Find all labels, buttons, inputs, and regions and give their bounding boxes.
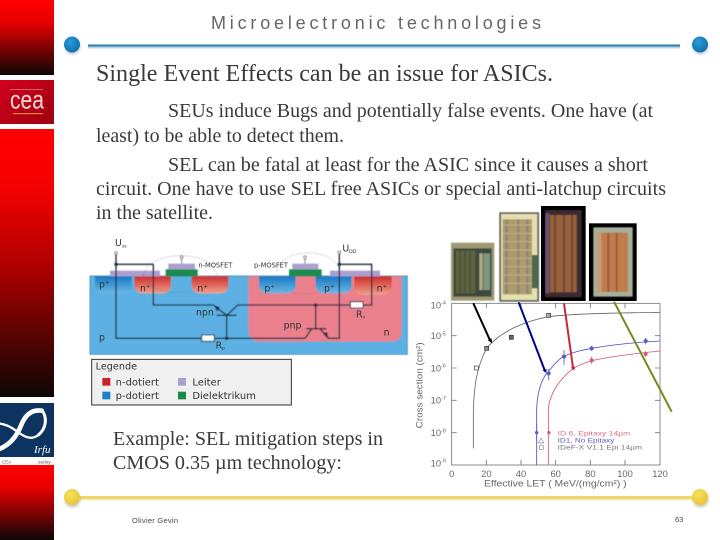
cross section chart: 80: [585, 469, 596, 479]
cross section chart: -9: [441, 459, 446, 465]
cross section chart: 10: [431, 300, 441, 310]
cross section chart: 0: [449, 469, 454, 479]
example caption: [113, 428, 383, 474]
example caption: Example: SEL mitigation steps in: [113, 428, 383, 450]
cross section chart: 40: [516, 469, 526, 479]
cross section chart: -8: [441, 428, 446, 434]
legend box: p-dotiert: [116, 391, 159, 402]
latchup cross-section diagram: [90, 238, 407, 405]
Irfu logo: saclay: [38, 460, 52, 464]
chip 1: [451, 243, 494, 301]
cross section chart: 10: [431, 331, 441, 341]
cross section chart: -7: [441, 396, 446, 402]
cross section chart: [415, 300, 672, 488]
body text: SEU: [96, 100, 653, 147]
latchup cross-section diagram: DD: [349, 249, 357, 255]
CEA logo: cea: [10, 84, 44, 114]
latchup cross-section diagram: p: [324, 283, 330, 294]
cross section chart: Effective LET ( MeV/(mg/cm²) ): [484, 478, 627, 488]
Irfu logo: [0, 403, 54, 465]
CEA logo: [0, 80, 54, 124]
left red sidebar: [0, 0, 54, 540]
latchup cross-section diagram: +: [146, 284, 150, 290]
body text: SEL: in the satellite.: [96, 202, 213, 224]
body text: SEU: SEUs induce Bugs and potentially false events. One have (at: [168, 100, 653, 122]
cross section chart: 100: [617, 469, 633, 479]
footer author: Olivier Gevin: [132, 516, 178, 525]
latchup cross-section diagram: +: [270, 284, 275, 290]
title: Microelectronic technologies: [211, 13, 541, 33]
latchup cross-section diagram: R: [356, 309, 362, 320]
latchup cross-section diagram: pnp: [284, 321, 301, 332]
latchup cross-section diagram: +: [203, 284, 208, 290]
latchup cross-section diagram: U: [342, 244, 349, 255]
latchup cross-section diagram: +: [330, 284, 334, 290]
latchup cross-section diagram: p: [264, 283, 270, 294]
cross section chart: IDeF-X V1.1 Epi 14µm: [558, 445, 643, 452]
latchup cross-section diagram: p: [99, 279, 105, 290]
latchup cross-section diagram: n: [384, 327, 390, 338]
Irfu logo: Irfu: [33, 444, 51, 456]
legend box: n-dotiert: [116, 377, 159, 388]
legend box: Dielektrikum: [192, 391, 256, 402]
latchup cross-section diagram: npn: [196, 308, 214, 319]
example caption: CMOS 0.35 µm technology:: [113, 452, 342, 474]
latchup cross-section diagram: ss: [122, 244, 127, 249]
body text: SEL: circuit. One have to use SEL free ASICs or special anti-latchup circuits: [96, 178, 666, 200]
cross section chart: Cross section (cm²): [415, 342, 425, 428]
legend box: [92, 359, 291, 405]
cross section chart: ID 6, Epitaxy 14µm: [558, 430, 631, 437]
cross section chart: 10: [431, 396, 441, 406]
latchup cross-section diagram: n: [197, 283, 203, 294]
cross section chart: 10: [431, 363, 441, 373]
chip 2: [499, 212, 539, 302]
cross section chart: -4: [441, 301, 446, 307]
latchup cross-section diagram: p-MOSFET: [254, 262, 289, 270]
bottom yellow divider: [64, 489, 708, 508]
body text: SEU: least) to be able to detect them.: [96, 125, 344, 147]
cross section chart: 60: [550, 469, 561, 479]
heading: Single Event Effects can be an issue for ASICs.: [96, 61, 553, 87]
latchup cross-section diagram: n-MOSFET: [198, 261, 233, 269]
cross section chart: 120: [652, 469, 668, 479]
latchup cross-section diagram: p: [222, 347, 225, 352]
cross section chart: ID1, No Epitaxy: [558, 438, 615, 445]
chip photos: [451, 206, 637, 302]
legend box: Leiter: [192, 377, 222, 388]
latchup cross-section diagram: n: [140, 283, 146, 294]
latchup cross-section diagram: n: [377, 283, 383, 294]
chip 4: [589, 223, 637, 301]
chip 3: [541, 206, 586, 301]
latchup cross-section diagram: n: [362, 316, 365, 321]
latchup cross-section diagram: +: [105, 280, 109, 286]
cross section chart: 10: [431, 458, 441, 468]
latchup cross-section diagram: U: [115, 238, 122, 249]
body text: SEL: [96, 154, 666, 224]
page number: 63: [675, 515, 683, 524]
cross section chart: -6: [441, 364, 446, 370]
cross section chart: 10: [431, 428, 441, 438]
latchup cross-section diagram: R: [216, 340, 222, 351]
Irfu logo: CEA: [2, 460, 11, 464]
body text: SEL: SEL can be fatal at least for the ASIC since it causes a short: [168, 154, 648, 176]
latchup cross-section diagram: p: [99, 333, 105, 344]
cross section chart: 20: [481, 469, 492, 479]
legend box: Legende: [96, 362, 137, 373]
top blue divider: [64, 36, 708, 54]
latchup cross-section diagram: +: [383, 284, 387, 290]
cross section chart: -5: [441, 331, 446, 337]
